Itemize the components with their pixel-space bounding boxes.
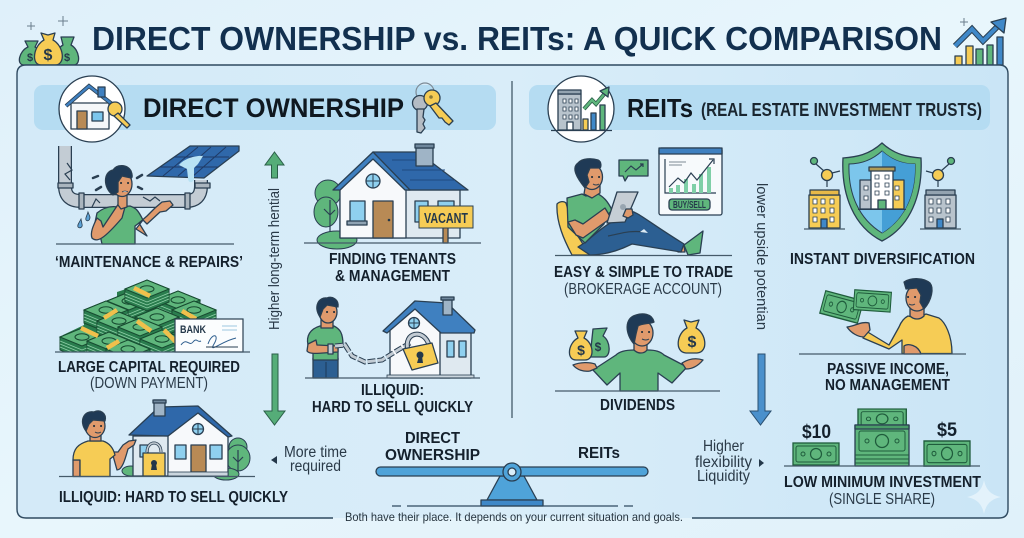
illustration: dividends: $ bbox=[577, 342, 585, 358]
illustration: vacant house: VACANT bbox=[424, 211, 468, 227]
illustration: dividends: $ bbox=[595, 340, 602, 354]
illustration: low minimum investment: $10 bbox=[802, 422, 831, 443]
seesaw label: reits: REITs bbox=[578, 445, 620, 462]
label: higher long-term potential: Higher long-term hential bbox=[266, 188, 283, 330]
label: low minimum investment bbox=[784, 474, 981, 508]
label: low minimum investment: LOW MINIMUM INVESTMENT bbox=[784, 474, 981, 491]
seesaw graphic bbox=[376, 463, 648, 506]
header: reits: REITs bbox=[627, 93, 693, 123]
illustration: passive income bbox=[799, 279, 966, 354]
header: direct ownership: DIRECT OWNERSHIP bbox=[143, 93, 404, 123]
icon: sparkle watermark bbox=[967, 480, 1001, 514]
seesaw comparison bbox=[376, 430, 648, 506]
illustration: illiquid chain and lock bbox=[305, 297, 480, 378]
icon: money bags bbox=[19, 16, 79, 65]
illustration: easy to trade: BUY/SELL bbox=[673, 200, 706, 211]
label: finding tenants and management bbox=[329, 251, 456, 285]
illustration: cash stacks and bank cheque: BANK bbox=[180, 324, 206, 336]
arrow: down blue bbox=[750, 354, 771, 425]
label: illiquid hard to sell quickly right: ILLIQUID: bbox=[361, 382, 424, 399]
title: DIRECT OWNERSHIP vs. REITs: A QUICK COMPARISON bbox=[92, 21, 942, 58]
illustration: maintenance and repairs bbox=[56, 146, 239, 244]
label: finding tenants and management: FINDING TENANTS bbox=[329, 251, 456, 268]
seesaw label: direct ownership: OWNERSHIP bbox=[385, 447, 480, 464]
illustration: cash stacks and bank cheque bbox=[55, 280, 250, 353]
callout: more time required bbox=[271, 444, 347, 475]
label: instant diversification: INSTANT DIVERSIFICATION bbox=[790, 251, 975, 268]
label: passive income no management bbox=[825, 361, 950, 394]
label: passive income no management: PASSIVE INCOME, bbox=[827, 361, 949, 378]
label: low minimum investment: (SINGLE SHARE) bbox=[829, 491, 935, 508]
label: large capital required: LARGE CAPITAL REQUIRED bbox=[58, 359, 240, 376]
panel: reits bbox=[529, 76, 990, 508]
footer note: Both have their place. It depends on your current situation and goals. bbox=[345, 510, 683, 524]
arrow: up green bbox=[265, 152, 284, 178]
callout: higher flexibility liquidity: Higher bbox=[703, 438, 744, 455]
label: large capital required bbox=[58, 359, 240, 392]
illustration: person with locked house bbox=[59, 400, 255, 480]
icon: money bags: $ bbox=[27, 52, 33, 64]
arrow: down green bbox=[264, 354, 285, 425]
label: easy and simple to trade: EASY & SIMPLE TO TRADE bbox=[554, 264, 733, 281]
label: passive income no management: NO MANAGEMENT bbox=[825, 377, 950, 394]
label: dividends: DIVIDENDS bbox=[600, 397, 675, 414]
header: reits bbox=[529, 76, 990, 142]
callout: more time required: More time bbox=[284, 444, 347, 461]
seesaw label: direct ownership: DIRECT bbox=[405, 430, 460, 447]
callout: higher flexibility liquidity bbox=[695, 438, 764, 485]
illustration: easy to trade bbox=[555, 148, 732, 256]
label: finding tenants and management: & MANAGEMENT bbox=[335, 268, 450, 285]
header: direct ownership bbox=[34, 76, 496, 142]
label: large capital required: (DOWN PAYMENT) bbox=[90, 375, 208, 392]
illustration: low minimum investment: $5 bbox=[937, 420, 957, 441]
header: reits: (REAL ESTATE INVESTMENT TRUSTS) bbox=[701, 100, 982, 120]
callout: more time required: required bbox=[290, 458, 341, 475]
label: maintenance and repairs: ‘MAINTENANCE & REPAIRS’ bbox=[55, 254, 243, 271]
panel: direct ownership bbox=[34, 76, 496, 506]
illustration: dividends bbox=[555, 314, 720, 391]
illustration: dividends: $ bbox=[688, 334, 697, 351]
icon: growth chart bbox=[955, 18, 1006, 65]
seesaw label: direct ownership bbox=[385, 430, 480, 464]
label: illiquid hard to sell quickly right: HARD TO SELL QUICKLY bbox=[312, 399, 473, 416]
label: illiquid hard to sell quickly bottom: ILLIQUID: HARD TO SELL QUICKLY bbox=[59, 489, 288, 506]
label: illiquid hard to sell quickly right bbox=[312, 382, 473, 416]
icon: money bags: $ bbox=[64, 52, 70, 64]
callout: higher flexibility liquidity: Liquidity bbox=[697, 468, 750, 485]
label: lower upside potential: lower upside potentian bbox=[753, 183, 770, 330]
icon: money bags: $ bbox=[44, 47, 53, 64]
label: easy and simple to trade bbox=[554, 264, 733, 298]
label: easy and simple to trade: (BROKERAGE ACCOUNT) bbox=[564, 281, 722, 298]
illustration: low minimum investment bbox=[784, 409, 980, 466]
illustration: instant diversification bbox=[804, 143, 961, 241]
illustration: vacant house bbox=[304, 144, 481, 249]
callout: higher flexibility liquidity: flexibility bbox=[695, 454, 752, 471]
